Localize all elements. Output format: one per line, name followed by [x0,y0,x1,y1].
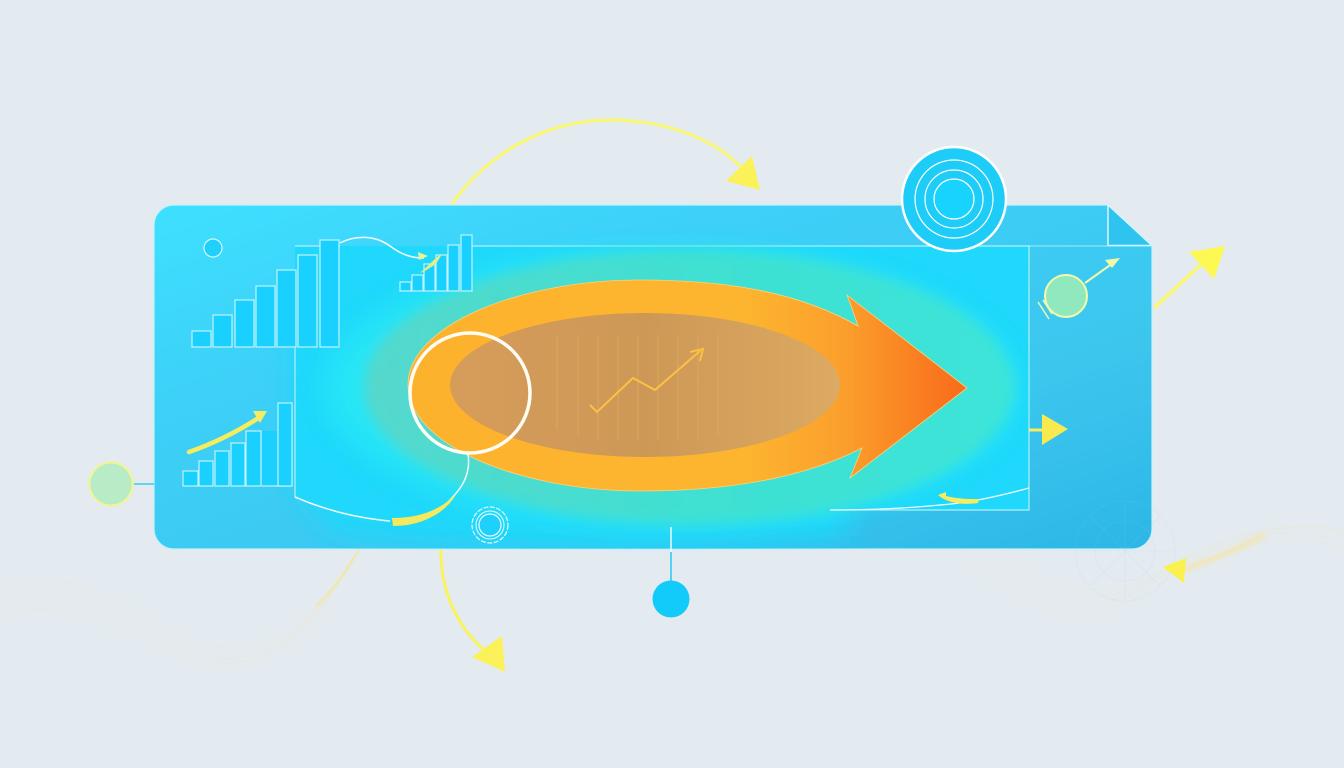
inner frame [295,246,1152,547]
green glow ellipse [364,250,1014,524]
bottom curved arrow [441,549,505,672]
yellow rising arrow [189,411,267,452]
decorative wave lines bottom left [0,552,358,668]
brown inner ellipse [450,313,840,457]
target circle top right [902,147,1006,251]
chart grid lines [557,335,718,440]
small bar chart top [192,240,339,347]
halo ellipse [325,252,1015,524]
small curved yellow arrow lower right [830,488,1029,510]
main panel [154,205,1152,549]
central orange arrow [408,280,967,491]
yellow arrow right of frame [1029,414,1068,445]
ring connector and yellow swoosh [392,454,469,526]
bar chart bottom left [183,403,292,486]
left green node with connector [90,462,154,506]
folded corner [1108,205,1152,246]
top arc arrow [452,120,760,204]
bottom blue node with connector [652,527,690,618]
top right arrow [1154,246,1225,308]
bar chart top middle [400,235,472,291]
decorative wave lines bottom right [965,527,1344,613]
faint gear wheel lower right [1075,501,1175,601]
small ring icon bottom [472,507,508,543]
yellow arrow lower right [1163,535,1265,583]
infographic canvas [0,118,1344,672]
small circle top left [204,239,222,257]
green circle with arrow on panel right [1038,258,1120,319]
trend line [590,349,703,412]
white ring on arrow [410,333,530,453]
bottom left yellow tail [316,549,359,606]
white curved arrow between charts [340,237,428,260]
small rising arrow [420,254,442,273]
